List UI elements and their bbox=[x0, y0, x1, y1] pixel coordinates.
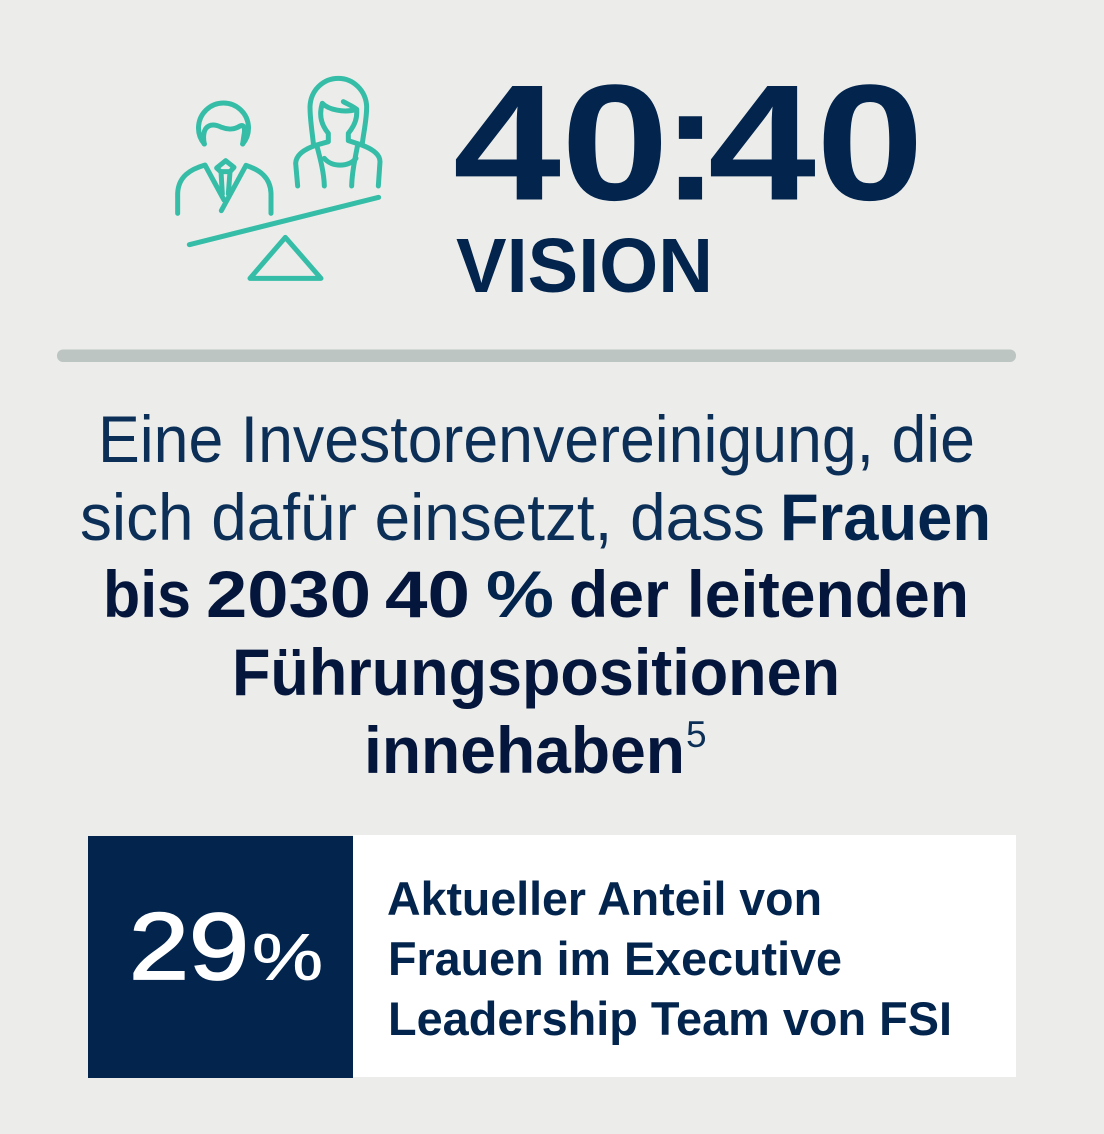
icon: scale beam bbox=[189, 197, 379, 245]
text block: description: Frauen bbox=[780, 480, 991, 554]
text block: description: 40 bbox=[385, 557, 470, 631]
text block: description: 2030 bbox=[206, 557, 371, 631]
text block: description: Eine Investorenvereinigung, die bbox=[98, 402, 975, 476]
text block: description: der leitenden bbox=[569, 557, 969, 631]
icon: man and woman on balance scale bbox=[178, 78, 380, 278]
stat: 29% bbox=[129, 894, 323, 1000]
text: stat description: Leadership Team von FSI bbox=[388, 992, 952, 1045]
text: stat description: Frauen im Executive bbox=[388, 932, 842, 985]
text block: description: Führungspositionen bbox=[232, 635, 840, 709]
text: stat description: Aktueller Anteil von bbox=[387, 872, 822, 925]
icon: scale triangle bbox=[250, 237, 321, 278]
text block: description: innehaben bbox=[364, 713, 685, 787]
text block: description: % bbox=[486, 557, 554, 631]
title: 40:40 bbox=[453, 50, 924, 234]
icon: woman bbox=[296, 78, 380, 186]
panel: navy stat box bbox=[88, 836, 353, 1078]
text: stat description bbox=[387, 872, 952, 1045]
text block: description: bis bbox=[103, 557, 191, 631]
text block: description: 5 bbox=[686, 714, 707, 755]
text block: description: sich dafür einsetzt, dass bbox=[80, 480, 765, 554]
subtitle: VISION: VISION bbox=[456, 223, 713, 309]
title: 40:40: 40 bbox=[453, 50, 669, 234]
title: 40:40: : bbox=[663, 50, 718, 234]
title: 40:40: 40 bbox=[708, 50, 924, 234]
stat: 29%: 29 bbox=[129, 894, 249, 1000]
icon: man bbox=[178, 103, 271, 213]
panel: white background bbox=[353, 835, 1016, 1077]
text block: description bbox=[80, 402, 991, 787]
stat: 29%: % bbox=[252, 920, 323, 994]
callout panel: current share bbox=[88, 835, 1016, 1078]
divider bbox=[57, 350, 1016, 362]
